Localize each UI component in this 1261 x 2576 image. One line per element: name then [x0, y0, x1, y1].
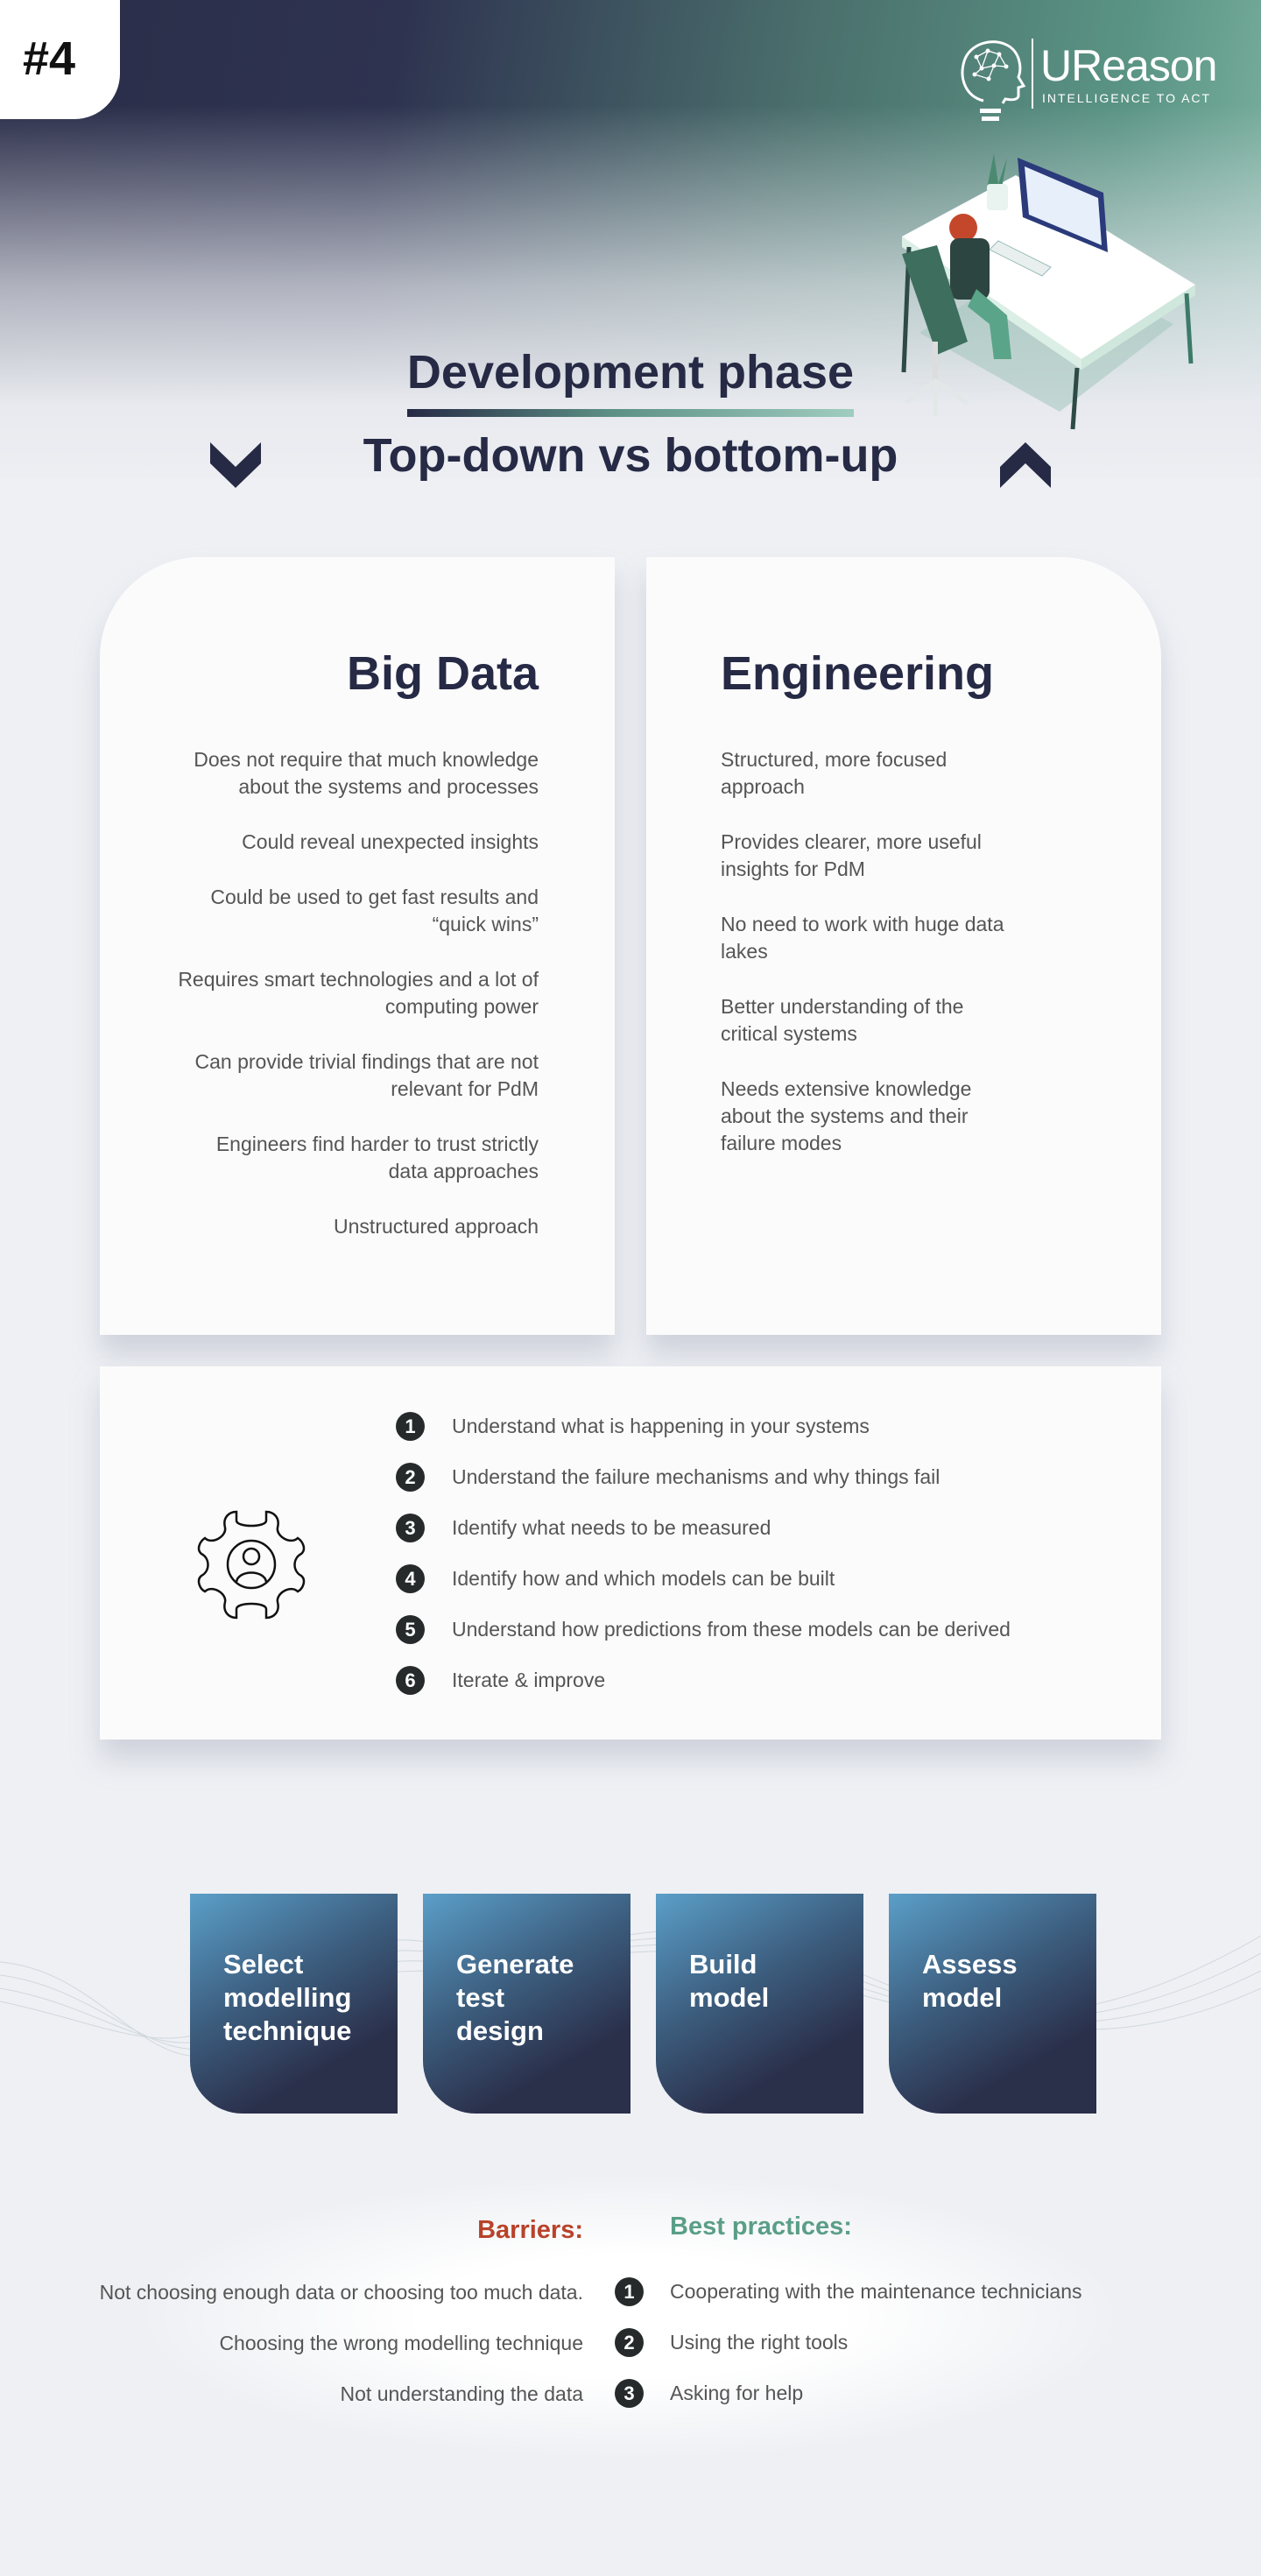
- best practice 2: Using the right tools: [670, 2331, 848, 2354]
- heading: Barriers: Barriers:: [477, 2216, 583, 2244]
- list: Big Data points: Requires smart technologies and a lot of: [178, 968, 539, 991]
- list: Engineering points: critical systems: [721, 1022, 857, 1045]
- list: Big Data points: Can provide trivial findings that are not: [194, 1050, 539, 1073]
- step: Generate test design: design: [456, 2015, 544, 2046]
- header background: [0, 0, 1261, 477]
- item 2: 2: [405, 1466, 416, 1488]
- list: Big Data points: “quick wins”: [433, 913, 539, 935]
- heading: Big Data: Big Data: [347, 647, 539, 700]
- list: Big Data points: Engineers find harder to trust strictly: [216, 1133, 539, 1155]
- icon: gear with person: [198, 1510, 305, 1619]
- best practice 2: 2: [623, 2332, 635, 2354]
- item 4: [396, 1564, 835, 1593]
- list: Engineering points: approach: [721, 775, 805, 798]
- heading: Best practices: Best practices:: [670, 2213, 852, 2241]
- logo: UReason: UReason: [1040, 41, 1216, 90]
- title underline: [407, 409, 854, 417]
- step: Build model: Build: [689, 1949, 757, 1980]
- step: Assess model: model: [922, 1982, 1002, 2013]
- list: Big Data points: Does not require that much knowledge: [194, 748, 539, 771]
- item 5: 5: [405, 1619, 416, 1641]
- panel: Big Data: [100, 557, 615, 1335]
- step: Build model: [656, 1894, 863, 2114]
- best practice 1: Cooperating with the maintenance technicians: [670, 2280, 1082, 2303]
- list: Engineering points: Better understanding of the: [721, 995, 963, 1018]
- list: Engineering points: Provides clearer, more useful: [721, 830, 982, 853]
- item 1: [396, 1412, 870, 1441]
- list: Engineering points: [721, 748, 1004, 1154]
- item 3: [396, 1514, 771, 1542]
- item 4: 4: [405, 1568, 416, 1590]
- step: Assess model: [889, 1894, 1096, 2114]
- list: Big Data points: Could reveal unexpected insights: [242, 830, 539, 853]
- heading: Engineering: Engineering: [721, 647, 994, 700]
- list: Big Data points: data approaches: [389, 1160, 539, 1182]
- list: Big Data points: computing power: [385, 995, 539, 1018]
- best practice 1: 1: [623, 2281, 635, 2303]
- item 5: Understand how predictions from these models can be derived: [452, 1618, 1011, 1641]
- soft glow background: [131, 2172, 1130, 2461]
- item 2: Understand the failure mechanisms and why things fail: [452, 1465, 940, 1488]
- list: Engineering points: lakes: [721, 940, 768, 963]
- best practice 3: Asking for help: [670, 2382, 803, 2404]
- list: barriers: Choosing the wrong modelling technique: [219, 2332, 583, 2354]
- list: Engineering points: Needs extensive knowledge: [721, 1077, 971, 1100]
- step: Generate test design: Generate: [456, 1949, 574, 1980]
- item 1: Understand what is happening in your systems: [452, 1415, 870, 1437]
- best practice 1: [615, 2277, 1082, 2306]
- badge: #4: #4: [23, 32, 75, 85]
- list: Big Data points: relevant for PdM: [391, 1077, 539, 1100]
- item 6: 6: [405, 1669, 416, 1691]
- logo: UReason: INTELLIGENCE TO ACT: [1042, 91, 1211, 105]
- item 3: Identify what needs to be measured: [452, 1516, 771, 1539]
- item 6: [396, 1666, 605, 1695]
- list: Engineering points: insights for PdM: [721, 857, 865, 880]
- list: Engineering points: about the systems and their: [721, 1105, 969, 1127]
- step: Build model: model: [689, 1982, 769, 2013]
- step: Select modelling technique: technique: [223, 2015, 351, 2046]
- step: Select modelling technique: modelling: [223, 1982, 351, 2013]
- item 1: 1: [405, 1415, 416, 1437]
- list: Engineering points: Structured, more focused: [721, 748, 947, 771]
- badge: #4: [0, 0, 120, 119]
- list: Big Data points: Unstructured approach: [334, 1215, 539, 1238]
- list: barriers: Not understanding the data: [341, 2382, 583, 2405]
- title: Development phase: Development phase: [407, 346, 854, 399]
- illustration: person at desk: [902, 154, 1195, 429]
- decorative waves: [0, 1931, 1261, 2057]
- panel: steps list: [100, 1366, 1161, 1740]
- list: Engineering points: No need to work with huge data: [721, 913, 1004, 935]
- step: Generate test design: [423, 1894, 630, 2114]
- list: Big Data points: about the systems and processes: [238, 775, 539, 798]
- icon: chevron up: [1000, 442, 1051, 488]
- item 3: 3: [405, 1517, 416, 1539]
- logo: UReason: [961, 39, 1216, 121]
- step: Generate test design: test: [456, 1982, 504, 2013]
- step: Select modelling technique: [190, 1894, 398, 2114]
- item 4: Identify how and which models can be built: [452, 1567, 835, 1590]
- panel: Engineering: [646, 557, 1161, 1335]
- list: Big Data points: [178, 748, 539, 1238]
- step: Select modelling technique: Select: [223, 1949, 303, 1980]
- subtitle: Top-down vs bottom-up: Top-down vs bottom-up: [363, 429, 898, 482]
- list: Big Data points: Could be used to get fast results and: [210, 886, 539, 908]
- list: barriers: [100, 2281, 583, 2405]
- best practice 3: 3: [623, 2382, 635, 2404]
- best practice 2: [615, 2328, 848, 2357]
- list: barriers: Not choosing enough data or choosing too much data.: [100, 2281, 583, 2304]
- best practice 3: [615, 2379, 803, 2408]
- list: Engineering points: failure modes: [721, 1132, 842, 1154]
- item 6: Iterate & improve: [452, 1669, 605, 1691]
- step: Assess model: Assess: [922, 1949, 1018, 1980]
- icon: chevron down: [210, 442, 261, 488]
